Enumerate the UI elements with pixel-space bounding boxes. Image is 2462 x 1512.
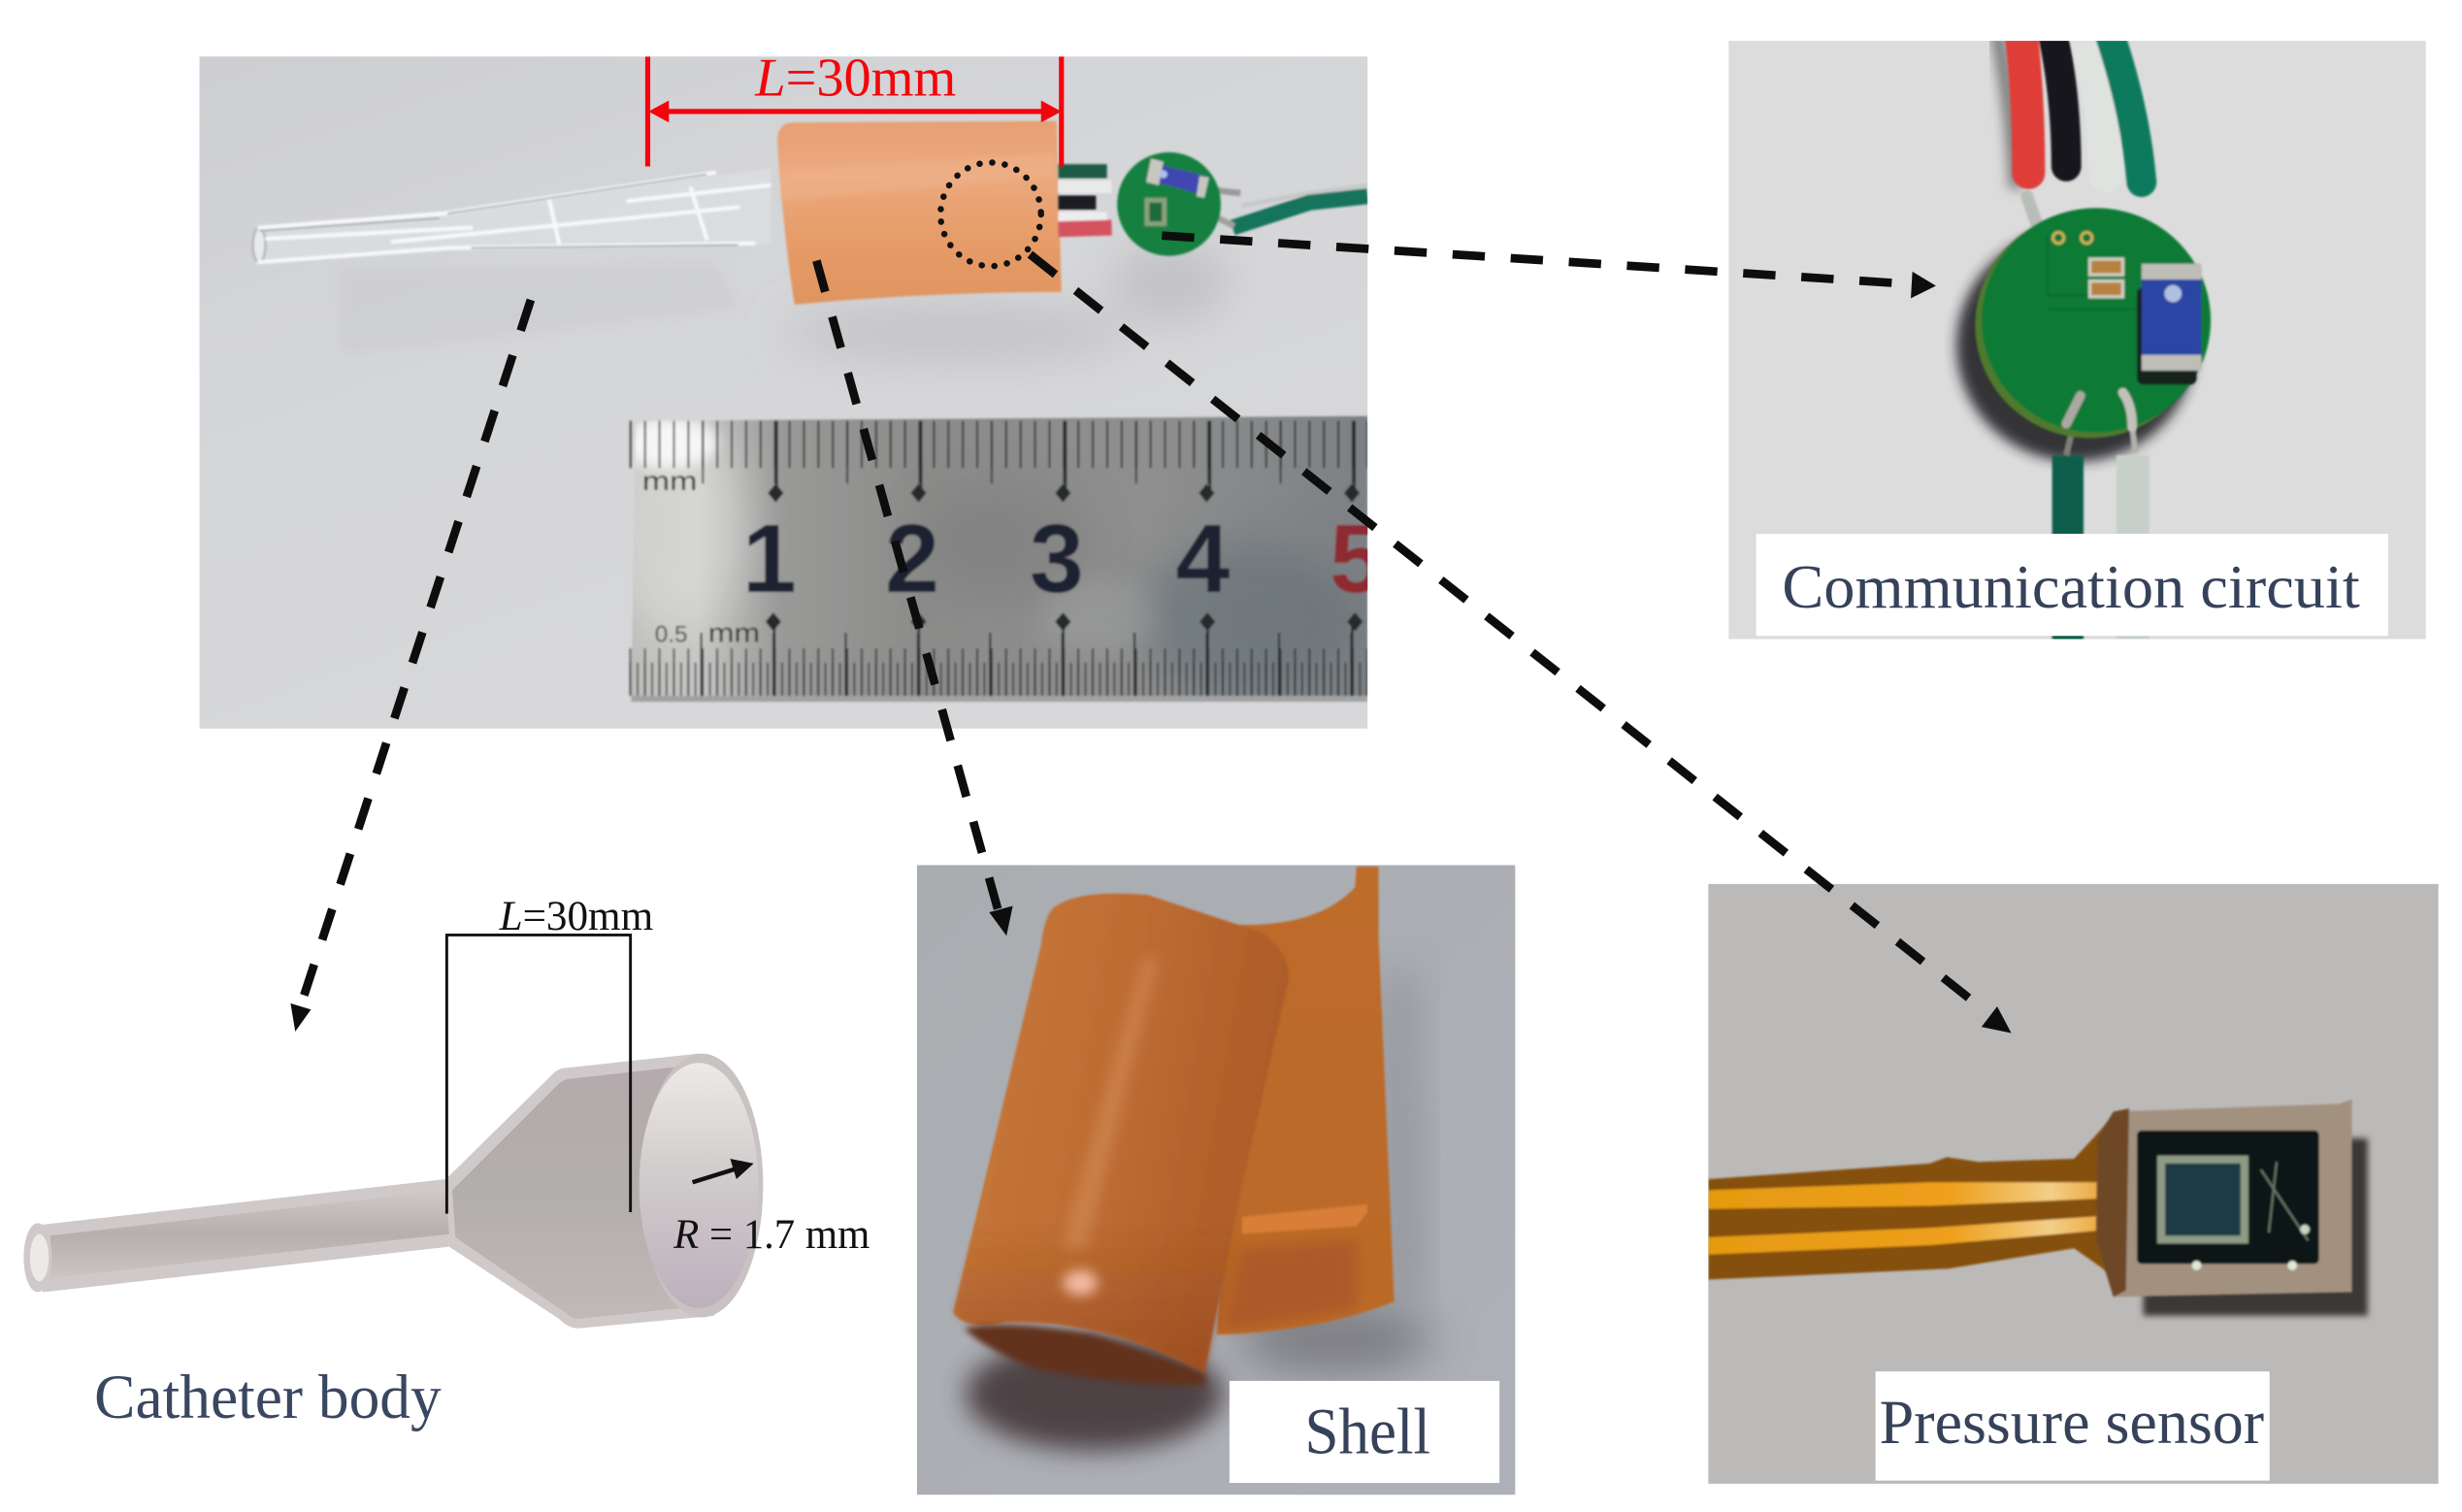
- arrow: to communication circuit: [1162, 236, 1936, 298]
- label: R = 1.7 mm: R = 1.7 mm: [673, 1211, 870, 1258]
- ruler: mm: [642, 466, 697, 496]
- shell rib: [1242, 1204, 1367, 1234]
- ruler numbers: [747, 523, 1368, 594]
- label: shell: [1230, 1381, 1499, 1483]
- label: communication circuit: Communication circuit: [1782, 553, 2360, 621]
- shell shadow: [966, 1337, 1223, 1451]
- ruler: [605, 416, 1384, 702]
- shell highlight: [1062, 958, 1159, 1296]
- ruler numbers: 1: [742, 505, 797, 613]
- arrow: to shell: [816, 261, 1013, 936]
- shell front piece: [953, 894, 1289, 1374]
- label: pressure sensor: Pressure sensor: [1880, 1387, 2264, 1457]
- orange shell cylinder: [777, 121, 1062, 305]
- top ticks: [630, 444, 1367, 679]
- lower shading on shell: [951, 1265, 1226, 1373]
- left wires to circuit: [1059, 171, 1112, 229]
- wire shadow: [1997, 31, 2016, 188]
- bracket: L dimension: [446, 935, 631, 1214]
- panel: assembled catheter photo with ruler: [200, 49, 1384, 729]
- panel: shell photo: [917, 865, 1515, 1495]
- narrow tube: [43, 1179, 449, 1292]
- red dimension: L=30mm: [647, 49, 1062, 166]
- ruler numbers: 3: [1030, 505, 1084, 613]
- right wires: [1209, 185, 1367, 228]
- funnel opening: [640, 1054, 763, 1317]
- label: catheter body: Catheter body: [94, 1362, 442, 1431]
- green circuit board: [1975, 208, 2211, 438]
- rear shell piece: [1217, 867, 1395, 1334]
- arrow: to pressure sensor: [1030, 254, 2012, 1034]
- rear lower band: [1222, 1240, 1357, 1331]
- flex cable: [1708, 1118, 2112, 1280]
- arrow: to catheter body: [290, 300, 531, 1032]
- label: communication circuit: [1756, 534, 2388, 636]
- panel: catheter body 3D model: [23, 893, 870, 1431]
- shell underside shadow: [964, 1325, 1206, 1385]
- panel: communication circuit photo: [1728, 31, 2426, 643]
- cylinder shadow: [785, 244, 1230, 361]
- clear catheter tube: [253, 168, 771, 262]
- circuit board: [1117, 152, 1221, 256]
- funnel body: [446, 1054, 714, 1329]
- panel: pressure sensor photo: [1708, 884, 2439, 1484]
- label: shell: Shell: [1305, 1394, 1430, 1467]
- ruler numbers: 5: [1329, 505, 1384, 613]
- bottom ticks: [630, 669, 1367, 689]
- label: L=30mm: L=30mm: [499, 893, 653, 939]
- ruler: 0.5: [655, 622, 687, 648]
- ruler numbers: 2: [885, 505, 939, 613]
- tube shadow: [340, 264, 738, 355]
- radius arrow: [693, 1159, 754, 1182]
- board shadow: [1956, 229, 2195, 462]
- lower wires: [2050, 428, 2150, 639]
- sensor package: [2096, 1100, 2352, 1297]
- red dimension: L=30mm: L=30mm: [754, 49, 956, 109]
- sensor shadow: [2143, 1138, 2368, 1316]
- ruler numbers: 4: [1175, 505, 1230, 613]
- diamonds: [766, 483, 1362, 631]
- highlight on shell: [778, 160, 1049, 199]
- tube opening: [23, 1223, 51, 1292]
- label: pressure sensor: [1876, 1371, 2270, 1481]
- ruler: mm: [708, 618, 760, 648]
- upper wires: [2020, 31, 2142, 223]
- dotted circle: sensor location: [940, 162, 1041, 266]
